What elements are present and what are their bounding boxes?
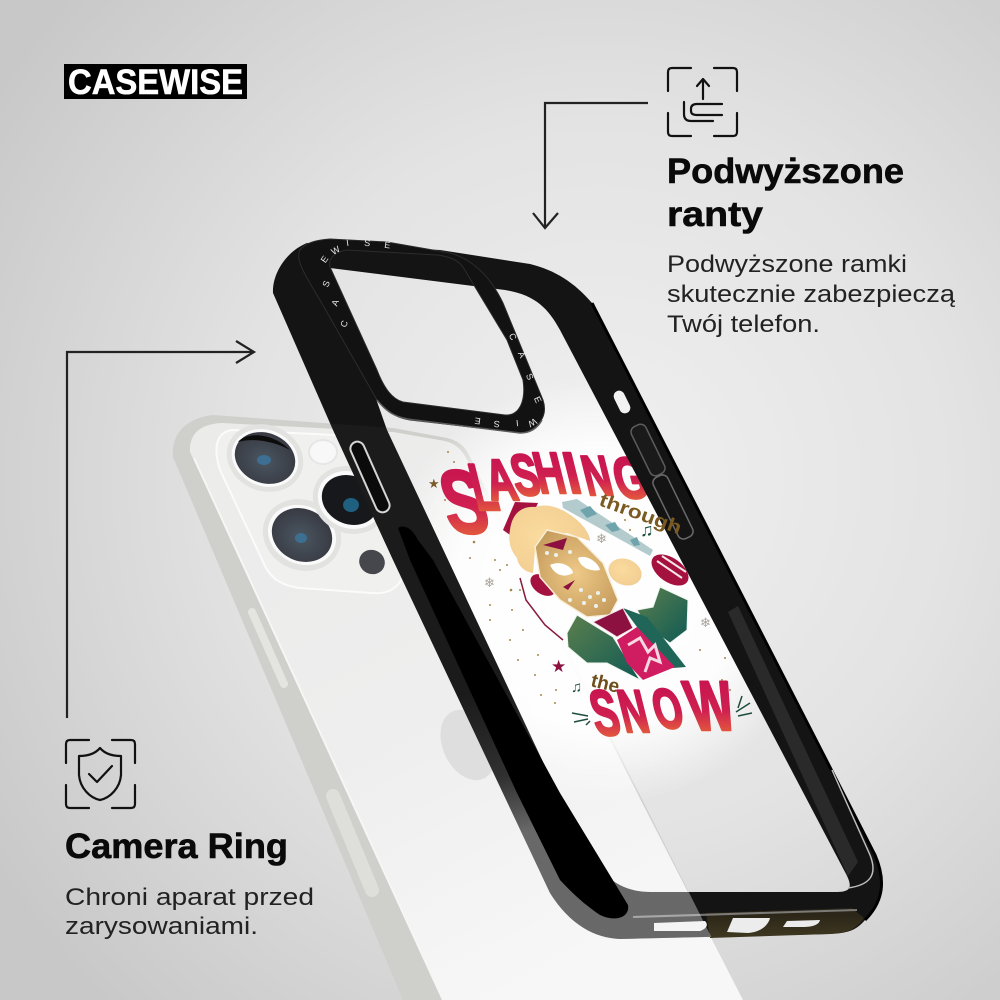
heading: Podwyższone ranty: ranty xyxy=(667,195,764,234)
right inner highlight xyxy=(832,770,873,888)
heading: Slashing: L xyxy=(462,451,505,524)
lens right xyxy=(302,454,398,546)
ring lettering: S xyxy=(524,372,536,382)
heading: Slashing: S xyxy=(504,442,546,508)
text: camera ring description: Chroni aparat przed xyxy=(65,884,314,911)
flash xyxy=(309,440,337,464)
clear phone case frame xyxy=(273,243,882,939)
ring lettering: A xyxy=(329,298,341,308)
text: raised edges description: Podwyższone ramki xyxy=(667,251,907,278)
jacket left xyxy=(567,615,640,680)
bottom band lower xyxy=(706,908,864,938)
label: the: the xyxy=(589,670,622,698)
ring lettering: E xyxy=(319,254,330,265)
right band panel xyxy=(728,606,858,876)
case outer rim xyxy=(592,303,882,920)
heading: Slashing: H xyxy=(527,440,572,506)
heading: Slashing: I xyxy=(557,440,587,506)
ring lettering: E xyxy=(384,240,391,250)
jacket right xyxy=(623,608,686,668)
heading: Snow xyxy=(583,668,744,749)
power button cutout xyxy=(348,439,392,515)
translucent overlay on phone xyxy=(460,691,712,939)
heading: Slashing: G xyxy=(606,445,655,510)
sleeve xyxy=(637,587,688,643)
heading: Podwyższone ranty: Podwyższone xyxy=(667,152,904,191)
left slot xyxy=(398,526,628,918)
sweater xyxy=(617,627,675,680)
phone case artwork xyxy=(428,440,752,749)
ring lettering: S xyxy=(493,419,500,429)
music notes: ♫ xyxy=(571,679,582,696)
heading: Podwyższone ranty xyxy=(667,152,904,234)
ring lettering: A xyxy=(516,350,528,360)
snowflakes: ❄ xyxy=(700,615,711,630)
red flower: ★ xyxy=(551,657,566,676)
lens bottom xyxy=(251,486,353,584)
apple logo xyxy=(430,701,506,789)
snowflakes: ❄ xyxy=(484,575,495,590)
leaves xyxy=(572,696,752,725)
ear muff right xyxy=(605,554,645,590)
arrow: raised edges xyxy=(533,103,648,228)
camera plateau xyxy=(216,430,403,593)
text: raised edges description: Twój telefon. xyxy=(667,311,820,338)
icon: raised edge upload xyxy=(668,68,737,136)
side button lower cutout xyxy=(651,473,695,541)
ring lettering: E xyxy=(532,395,544,405)
music notes: ♫ xyxy=(640,520,654,540)
microphone xyxy=(355,546,389,578)
heading: Slashing: S xyxy=(430,452,498,552)
music notes xyxy=(571,520,654,696)
ear muff xyxy=(526,570,560,600)
arrow: camera ring xyxy=(67,341,254,718)
heading: Snow: N xyxy=(612,678,655,745)
text: raised edges description: skutecznie zabezpieczą xyxy=(667,281,955,308)
ring highlight xyxy=(377,400,542,433)
ring lettering: W xyxy=(329,244,342,257)
charging port xyxy=(654,921,707,931)
icon: shield check xyxy=(66,740,135,808)
metal edge highlight xyxy=(194,458,443,1000)
phone body xyxy=(173,413,743,1000)
ring lettering: W xyxy=(526,416,539,429)
snowflakes xyxy=(484,531,711,630)
side cutout small xyxy=(612,389,632,415)
logo: CASEWISE: CASEWISE xyxy=(68,63,243,102)
ring lettering: C xyxy=(338,319,350,329)
snowflakes: ❄ xyxy=(596,531,607,546)
ring lettering: S xyxy=(364,238,371,248)
hockey stick xyxy=(562,499,653,556)
heading: Camera Ring: Camera Ring xyxy=(65,827,288,866)
ring lettering: C xyxy=(507,332,519,342)
mask marks xyxy=(543,538,575,590)
artwork backing glow xyxy=(432,416,754,788)
text: camera ring description xyxy=(65,884,314,940)
ring lettering: I xyxy=(516,418,519,428)
glove xyxy=(646,548,694,592)
bottom hole right xyxy=(783,920,820,927)
heading: Slashing xyxy=(430,440,655,552)
heading: Slashing: A xyxy=(478,448,523,512)
bottom hole middle xyxy=(727,918,770,933)
heading: Snow: O xyxy=(646,678,690,741)
text: raised edges description xyxy=(667,251,955,338)
heading: Snow: S xyxy=(583,677,627,749)
side button upper xyxy=(252,612,284,684)
heading: Slashing: N xyxy=(576,446,619,508)
santa hat xyxy=(503,502,538,542)
star: ★ xyxy=(428,476,440,491)
ring lettering xyxy=(319,238,544,429)
ear muff cord xyxy=(520,578,563,640)
side button upper cutout xyxy=(629,422,667,478)
hood xyxy=(509,505,590,573)
ring lettering: S xyxy=(320,279,332,289)
ring lettering: I xyxy=(346,238,350,248)
lens top xyxy=(216,413,314,503)
mask xyxy=(535,530,618,617)
heading: Snow: W xyxy=(677,668,744,746)
text over case: through: through xyxy=(596,490,684,539)
side button lower xyxy=(333,796,372,890)
eyes xyxy=(550,563,573,576)
bottom highlight xyxy=(633,910,857,917)
snow dots xyxy=(444,451,731,704)
ring lettering: E xyxy=(474,416,481,426)
collar xyxy=(593,608,633,637)
camera ring with brand lettering xyxy=(299,238,544,433)
text: camera ring description: zarysowaniami. xyxy=(65,913,258,940)
